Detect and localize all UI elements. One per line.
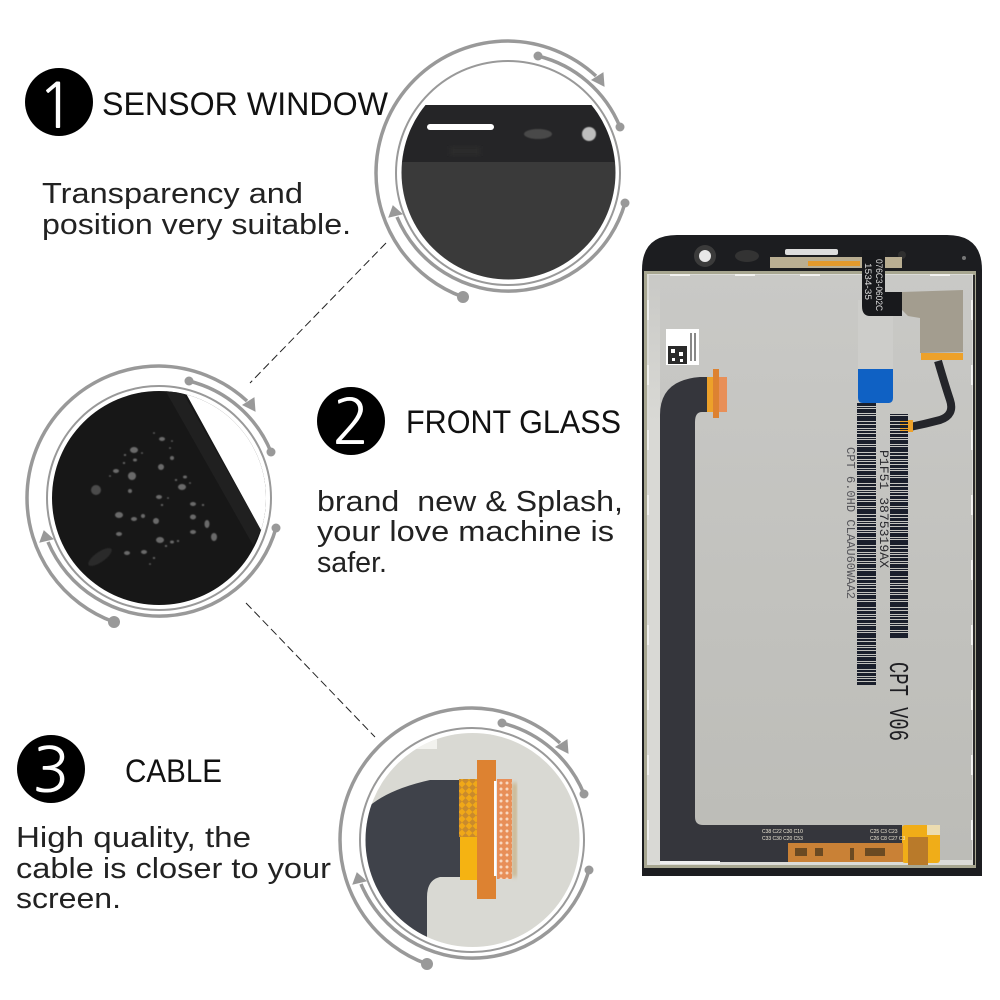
- blue tape: [858, 369, 893, 403]
- printed text: CPT V06: [881, 662, 911, 741]
- photo: sensor window close-up: [400, 105, 618, 282]
- photo: water droplets on glass: [50, 388, 270, 606]
- flex cable top: 1534-35: [862, 263, 873, 300]
- printed text: CPT 6.0HD CLAAU60WAA2: [843, 447, 857, 599]
- badge: number 1: [25, 68, 93, 137]
- ring arcs and arrows: [376, 41, 630, 303]
- heading: sensor window: SENSOR WINDOW: [102, 86, 389, 122]
- flex cable bottom connector: [762, 825, 940, 865]
- text: front glass description: your love machine is: [317, 516, 614, 548]
- text: cable description: screen.: [16, 883, 121, 915]
- flex cable bottom connector: C38 C22 C30 C10: [762, 829, 803, 835]
- text: sensor window description: Transparency and: [42, 178, 303, 210]
- circle callout: front glass: [27, 366, 280, 628]
- flex cable bottom connector: C26 C8 C27 C3: [870, 836, 906, 842]
- flex cable top: 076C3-0602C: [873, 259, 884, 311]
- frame edge: [644, 271, 976, 868]
- badge: number 3: [17, 735, 85, 803]
- badge: number 1: 1: [37, 75, 75, 137]
- panel: LCD screen back view: [642, 235, 982, 876]
- flex cable top: [862, 250, 963, 432]
- ring arcs and arrows: [27, 366, 280, 628]
- flex cable left and bottom: [660, 369, 902, 864]
- text: front glass description: [317, 486, 623, 579]
- text: cable description: [16, 822, 331, 915]
- dashed connector: front glass to cable: [246, 603, 375, 737]
- circle callout: cable: [340, 708, 594, 970]
- silver panel: [649, 275, 972, 860]
- text: cable description: cable is closer to your: [16, 853, 331, 885]
- printed text: P1F51 3875319AX: [876, 450, 891, 568]
- badge: number 3: 3: [32, 739, 70, 801]
- text: sensor window description: [42, 178, 351, 241]
- flex cable bottom connector: C33 C30 C20 C53: [762, 836, 803, 842]
- dashed connector: sensor window to front glass: [250, 243, 386, 383]
- text: front glass description: brand new & Splash,: [317, 486, 623, 518]
- barcodes: [857, 402, 876, 686]
- printed text: [847, 448, 908, 740]
- text: front glass description: safer.: [317, 547, 387, 579]
- top sensor details: [694, 245, 966, 268]
- heading: front glass: FRONT GLASS: [406, 404, 621, 440]
- circle callout: sensor window: [376, 41, 630, 303]
- badge: number 2: [317, 387, 385, 455]
- text: sensor window description: position very suitable.: [42, 209, 351, 241]
- badge: number 2: 2: [332, 391, 370, 453]
- heading: cable: CABLE: [125, 753, 222, 789]
- ring arcs and arrows: [340, 708, 594, 970]
- QR label: [666, 329, 699, 365]
- flex cable bottom connector: C25 C3 C23: [870, 829, 898, 835]
- text: cable description: High quality, the: [16, 822, 251, 854]
- photo: flex cable connector: [360, 730, 585, 950]
